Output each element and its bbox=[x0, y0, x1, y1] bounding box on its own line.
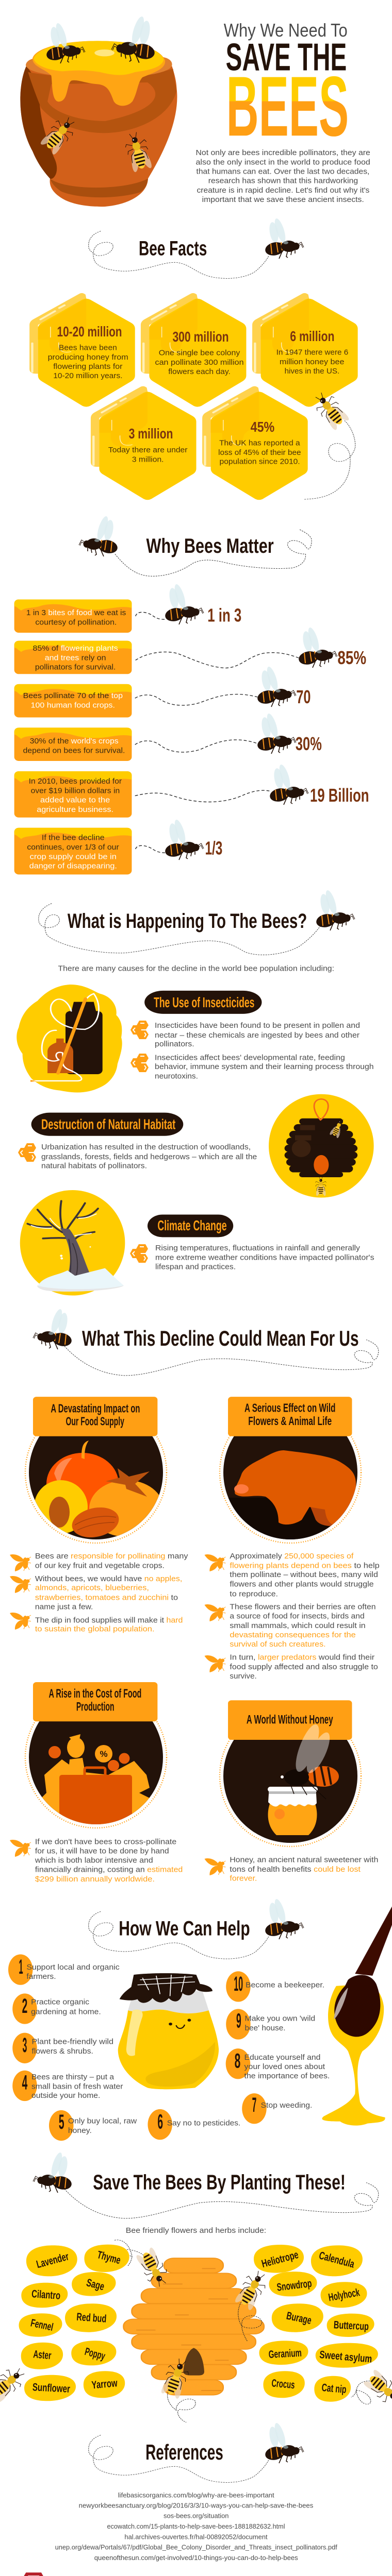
item 5: Only buy local, raw bbox=[68, 2116, 137, 2125]
panel: a serious effect on wild flowers and animal life bbox=[204, 1397, 380, 1681]
fact: 45%: 45% bbox=[251, 419, 274, 435]
text block with bee bullets: Without bees, we would have no apples, bbox=[35, 1574, 182, 1583]
fact: 10-20 million: 10-20 million years. bbox=[53, 371, 123, 380]
fact: 3 million bbox=[91, 386, 196, 500]
text block bbox=[155, 1244, 374, 1271]
item 10: Become a beekeeper. bbox=[246, 1980, 324, 1989]
panel: bee facts hexagons bbox=[29, 293, 358, 500]
text block with bee bullets bbox=[204, 1552, 380, 1681]
plant: Cilantro: Cilantro bbox=[31, 2288, 61, 2302]
fact: 300 million: can pollinate 300 million bbox=[155, 358, 244, 366]
fact: 10-20 million: 10-20 million bbox=[57, 324, 122, 340]
bar: 1/3 bbox=[14, 828, 222, 874]
item 4: outside your home. bbox=[31, 2091, 100, 2100]
plant: Calendula: Calendula bbox=[318, 2249, 356, 2270]
item 9: 9 bbox=[236, 2010, 241, 2032]
text block with bee bullets: survive. bbox=[230, 1672, 257, 1681]
plant: Sage bbox=[72, 2272, 116, 2296]
illustration: honey dipper bbox=[322, 1906, 392, 2126]
heading pill bbox=[144, 991, 262, 1014]
text block with bee bullets: them pollinate – without bees, many wild bbox=[230, 1570, 378, 1579]
text block with bee bullet: for us, it will have to be done by hand bbox=[35, 1846, 169, 1855]
item 4: 4 bbox=[22, 2072, 27, 2094]
card header bbox=[228, 1700, 352, 1740]
item 6 bbox=[148, 2109, 240, 2140]
illustration: fruit bbox=[34, 1440, 164, 1541]
text block with bee bullets: The dip in food supplies will make it hard bbox=[35, 1616, 183, 1624]
references list: queenofthesun.com/get-involved/10-things-you-can-do-to-help-bees bbox=[94, 2554, 298, 2562]
text block with bee bullets: name just a few. bbox=[35, 1603, 93, 1611]
item 2: Practice organic bbox=[31, 1997, 89, 2006]
plant: Cilantro bbox=[21, 2283, 68, 2308]
item 9: Make you own 'wild bbox=[245, 2014, 315, 2023]
panel: why bees matter bars bbox=[14, 583, 369, 874]
item 5: 5 bbox=[59, 2111, 64, 2133]
item 10: 10 bbox=[234, 1973, 243, 1995]
item 10 bbox=[226, 1971, 324, 2002]
panel: a devastating impact on our food supply bbox=[10, 1397, 188, 1633]
bar: 19 Billion: over $19 billion dollars in bbox=[31, 786, 120, 795]
plant: Thyme bbox=[84, 2245, 129, 2272]
illustration: bear bbox=[223, 1450, 357, 1544]
plant: Heliotrope: Heliotrope bbox=[260, 2249, 300, 2270]
plant: Lavender bbox=[26, 2245, 77, 2276]
icon: yellow bee on hexagons bbox=[310, 388, 352, 432]
references list: ecowatch.com/15-plants-to-help-save-bees-1881882632.html bbox=[107, 2522, 285, 2530]
item 8: your loved ones about bbox=[244, 2062, 325, 2071]
text block with bee bullets: to sustain the global population. bbox=[35, 1625, 155, 1633]
illustration: honey jar and bee bbox=[268, 1766, 339, 1835]
plant: Crocus bbox=[263, 2371, 305, 2398]
bar: 19 Billion: added value to the bbox=[40, 795, 110, 804]
bar: 1/3: continues, over 1/3 of our bbox=[27, 843, 119, 852]
heading: Why Bees Matter bbox=[79, 515, 312, 576]
references list bbox=[55, 2491, 337, 2562]
fact: 6 million: 6 million bbox=[290, 329, 335, 345]
item 3: flowers & shrubs. bbox=[32, 2047, 93, 2056]
bar: 85%: 85% of flowering plants bbox=[32, 644, 118, 653]
plant: Sunflower bbox=[24, 2375, 76, 2401]
heading: Bee Facts bbox=[89, 217, 304, 278]
fact: 10-20 million: flowering plants for bbox=[53, 362, 123, 370]
item 7: 7 bbox=[252, 2094, 256, 2116]
text block: Insecticides affect bees' developmental rate, feeding bbox=[155, 1053, 345, 1062]
logo: Anypest bbox=[18, 2572, 123, 2576]
text block with bee bullet: which is both labor intensive and bbox=[35, 1856, 153, 1865]
plant: Calendula bbox=[311, 2245, 363, 2276]
fact: 6 million: million honey bee bbox=[280, 358, 344, 366]
text block with bee bullets: strawberries, tomatoes and zucchini to bbox=[35, 1594, 178, 1602]
illustration: sprayer bbox=[17, 985, 122, 1092]
text block with bee bullets: devastating consequences for the bbox=[230, 1631, 356, 1639]
heading pill bbox=[31, 1113, 183, 1136]
plant: Thyme: Thyme bbox=[96, 2249, 122, 2266]
text block with bee bullets: food supply affected and also struggle to bbox=[230, 1663, 378, 1671]
heading: How We Can Help: How We Can Help bbox=[119, 1918, 250, 1940]
bar: 1 in 3: 1 in 3 bbox=[207, 605, 241, 626]
bar: 30%: 30% of the world's crops bbox=[30, 737, 119, 745]
bar: 70: Bees pollinate 70 of the top bbox=[23, 691, 123, 700]
bar: 19 Billion: agriculture business. bbox=[37, 805, 113, 814]
item 6: Say no to pesticides. bbox=[167, 2119, 240, 2127]
heading pill: Climate Change bbox=[157, 1218, 227, 1233]
card header: A Rise in the Cost of Food bbox=[49, 1687, 141, 1700]
text block with bee bullets bbox=[10, 1552, 188, 1633]
icons: bees around the hive bbox=[0, 2245, 392, 2410]
text block with bee bullets: almonds, apricots, blueberries, bbox=[35, 1584, 149, 1592]
text block with bee bullets: of our key fruit and vegetable crops. bbox=[35, 1562, 165, 1570]
plant: Burage: Burage bbox=[285, 2310, 313, 2327]
plant: Buttercup: Buttercup bbox=[333, 2319, 369, 2333]
item 3: Plant bee-friendly wild bbox=[32, 2037, 113, 2046]
fact: 3 million: 3 million bbox=[129, 426, 173, 442]
fact: 300 million: 300 million bbox=[172, 329, 229, 345]
item 7 bbox=[242, 2093, 312, 2124]
item 5 bbox=[49, 2110, 137, 2141]
bar: 1/3: crop supply could be in bbox=[30, 852, 117, 861]
percent badge label: % bbox=[100, 1749, 108, 1759]
panel: the use of insecticides bbox=[17, 985, 374, 1092]
item 2 bbox=[12, 1993, 101, 2024]
heading: Bee Facts: Bee Facts bbox=[139, 237, 207, 260]
illustration: orange beehive bbox=[115, 2240, 372, 2422]
text block: natural habitats of pollinators. bbox=[41, 1161, 147, 1170]
text block: grasslands, forests, fields and hedgerows – which are all the bbox=[41, 1152, 257, 1161]
illustration: honey pot with bees bbox=[20, 15, 177, 207]
text block with bee bullets: Approximately 250,000 species of bbox=[230, 1552, 354, 1561]
fact: 45%: loss of 45% of their bee bbox=[218, 448, 301, 456]
heading: Why Bees Matter: Why Bees Matter bbox=[146, 534, 274, 557]
bar: 1 in 3 bbox=[14, 599, 241, 633]
fact: 45%: The UK has reported a bbox=[219, 438, 300, 447]
item 3: 3 bbox=[23, 2034, 27, 2057]
heading: What is Happening To The Bees?: There are many causes for the decline in the world bee population including: bbox=[58, 964, 334, 973]
fact: 6 million bbox=[252, 293, 358, 407]
plant: Geranium: Geranium bbox=[268, 2347, 302, 2361]
heading pill: The Use of Insecticides bbox=[154, 994, 254, 1011]
text block with bee bullets: survival of such creatures. bbox=[230, 1640, 326, 1649]
item 1 bbox=[8, 1954, 120, 1985]
item 4 bbox=[12, 2071, 123, 2101]
item 8 bbox=[226, 2048, 330, 2080]
fact: 3 million: Today there are under bbox=[108, 445, 188, 454]
panel: destruction of natural habitat bbox=[18, 1094, 374, 1198]
plant: Sweet asylum bbox=[316, 2343, 378, 2368]
heading: References bbox=[89, 2422, 304, 2482]
plant: Yarrow bbox=[84, 2371, 125, 2398]
text block with bee bullet bbox=[10, 1837, 183, 1884]
plant: Sage: Sage bbox=[85, 2277, 106, 2293]
intro text bbox=[196, 148, 370, 204]
panel: plant labels bbox=[19, 2245, 378, 2402]
bar: 19 Billion: In 2010, bees provided for bbox=[29, 777, 122, 786]
item 1: 1 bbox=[19, 1956, 23, 1978]
references list: hal.archives-ouvertes.fr/hal-00892052/document bbox=[124, 2533, 268, 2541]
panel: climate change bbox=[20, 1190, 374, 1296]
bar: 19 Billion bbox=[14, 771, 369, 818]
card header bbox=[33, 1682, 157, 1721]
icon: translucent bee wings bbox=[291, 1722, 334, 1776]
plant: Holyhock bbox=[321, 2282, 367, 2308]
item 8: the importance of bees. bbox=[244, 2071, 330, 2080]
heading pill: Destruction of Natural Habitat bbox=[41, 1116, 175, 1132]
panel: how we can help bbox=[8, 1906, 392, 2141]
fact: 3 million: 3 million. bbox=[132, 455, 164, 464]
text block with bee bullets: These flowers and their berries are often bbox=[230, 1603, 376, 1611]
item 9 bbox=[226, 2009, 315, 2040]
item 2: gardening at home. bbox=[31, 2007, 101, 2016]
fact: 300 million: flowers each day. bbox=[168, 367, 231, 376]
card header: Flowers & Animal Life bbox=[248, 1414, 332, 1428]
item 4: small basin of fresh water bbox=[31, 2082, 123, 2091]
plant: Heliotrope bbox=[254, 2245, 304, 2273]
bar: 1/3: danger of disappearing. bbox=[29, 861, 117, 870]
text block: nectar – these chemicals are ingested by bees and other bbox=[155, 1030, 360, 1039]
heading: What is Happening To The Bees? bbox=[39, 889, 355, 973]
panel: a world without honey bbox=[204, 1700, 378, 1883]
references list: sos-bees.org/situation bbox=[164, 2512, 229, 2520]
bar: 85%: pollinators for survival. bbox=[35, 663, 116, 671]
item 1: farmers. bbox=[26, 1972, 56, 1981]
bar: 70: 70 bbox=[296, 687, 311, 708]
text block with bee bullets: flowers and other plants would struggle bbox=[230, 1580, 374, 1588]
panel: a rise in the cost of food production bbox=[10, 1682, 183, 1884]
plant: Red bud bbox=[65, 2303, 117, 2332]
text block: Urbanization has resulted in the destruction of woodlands, bbox=[41, 1143, 251, 1151]
text block: Rising temperatures, fluctuations in rainfall and generally bbox=[155, 1244, 361, 1252]
plant: Holyhock: Holyhock bbox=[328, 2286, 361, 2303]
illustration: beehive bbox=[269, 1094, 374, 1198]
plant: Aster: Aster bbox=[33, 2348, 52, 2362]
item 6: 6 bbox=[157, 2111, 163, 2133]
fact: 300 million bbox=[141, 293, 246, 407]
item 4: Bees are thirsty – put a bbox=[31, 2072, 115, 2081]
plant: Yarrow: Yarrow bbox=[91, 2377, 118, 2391]
text block with bee bullet: forever. bbox=[230, 1874, 257, 1883]
card header: A Devastating Impact on bbox=[51, 1402, 140, 1415]
item 9: bee' house. bbox=[245, 2023, 286, 2032]
heading pill bbox=[148, 1215, 233, 1237]
heading: How We Can Help bbox=[89, 1898, 304, 1959]
plant: Burage bbox=[272, 2303, 323, 2332]
plant: Aster bbox=[21, 2343, 63, 2369]
item 3 bbox=[12, 2033, 113, 2063]
fact: 45%: population since 2010. bbox=[220, 457, 300, 466]
text block with bee bullets: a source of food for insects, birds and bbox=[230, 1612, 365, 1620]
fact: 10-20 million bbox=[29, 293, 135, 407]
item 5: honey. bbox=[68, 2126, 92, 2135]
bar: 85%: 85% bbox=[337, 648, 366, 668]
heading: References: References bbox=[145, 2441, 223, 2465]
text block with bee bullet: $299 billion annually worldwide. bbox=[35, 1875, 155, 1884]
text block with bee bullets: Bees are responsible for pollinating many bbox=[35, 1552, 188, 1561]
text block with bee bullet: tons of health benefits could be lost bbox=[230, 1865, 361, 1873]
plant: Snowdrop: Snowdrop bbox=[276, 2278, 313, 2294]
text block with bee bullet bbox=[204, 1855, 378, 1883]
plant: Cat nip: Cat nip bbox=[321, 2382, 347, 2396]
bar: 85% bbox=[14, 641, 366, 674]
fact: 6 million: hives in the US. bbox=[285, 367, 339, 375]
card header: Production bbox=[76, 1700, 115, 1714]
illustration: briefcase and money bbox=[42, 1734, 150, 1824]
plant: Fennel bbox=[19, 2313, 62, 2337]
text block with bee bullet: If we don't have bees to cross-pollinate bbox=[35, 1837, 176, 1846]
text block with bee bullets: to reproduce. bbox=[230, 1589, 278, 1598]
heading: Save The Bees By Planting These!: Bee friendly flowers and herbs include: bbox=[126, 2226, 266, 2234]
text block: Insecticides have been found to be present in pollen and bbox=[155, 1021, 360, 1030]
text block: more extreme weather conditions have impacted pollinator's bbox=[155, 1253, 374, 1262]
bar: 1 in 3: courtesy of pollination. bbox=[35, 618, 117, 626]
illustration: smiling honey jar bbox=[118, 1973, 219, 2089]
text block: neurotoxins. bbox=[155, 1072, 198, 1080]
title bbox=[224, 20, 349, 154]
card header bbox=[228, 1397, 352, 1436]
bar: 1/3: If the bee decline bbox=[42, 833, 105, 842]
text block with bee bullets: In turn, larger predators would find their bbox=[230, 1653, 375, 1662]
plant: Poppy bbox=[71, 2341, 116, 2365]
text block with bee bullets: flowering plants depend on bees to help bbox=[230, 1562, 380, 1570]
item 8: 8 bbox=[235, 2050, 240, 2073]
fact: 10-20 million: producing honey from bbox=[48, 353, 128, 362]
fact: 300 million: One single bee colony bbox=[159, 348, 240, 357]
references list: lifebasicsorganics.com/blog/why-are-bees-important bbox=[118, 2491, 274, 2499]
text block bbox=[155, 1021, 374, 1080]
plant: Poppy: Poppy bbox=[84, 2346, 107, 2363]
plant: Sunflower: Sunflower bbox=[32, 2381, 70, 2395]
fact: 45% bbox=[202, 386, 308, 500]
item 7: Stop weeding. bbox=[261, 2101, 312, 2110]
bar: 30%: depend on bees for survival. bbox=[23, 746, 125, 755]
text block with bee bullet: financially draining, costing an estimated bbox=[35, 1865, 183, 1874]
bar: 30%: 30% bbox=[296, 734, 322, 755]
bar: 85%: and trees rely on bbox=[45, 653, 106, 662]
heading: What This Decline Could Mean For Us bbox=[33, 1308, 379, 1376]
bar: 70: 100 human food crops. bbox=[31, 701, 115, 709]
card header: Our Food Supply bbox=[66, 1415, 124, 1428]
bar: 70 bbox=[14, 684, 311, 717]
text block: pollinators. bbox=[155, 1040, 194, 1048]
fact: 10-20 million: Bees have been bbox=[59, 343, 117, 352]
plant: Snowdrop bbox=[269, 2272, 317, 2296]
text block: lifespan and practices. bbox=[155, 1263, 236, 1271]
bar: 30% bbox=[14, 727, 322, 761]
item 1: Support local and organic bbox=[26, 1963, 120, 1972]
plant: Buttercup bbox=[327, 2314, 374, 2337]
plant: Sweet asylum: Sweet asylum bbox=[319, 2349, 372, 2365]
text block with bee bullets: small mammals, which could result in bbox=[230, 1621, 366, 1630]
plant: Fennel: Fennel bbox=[29, 2317, 54, 2333]
plant: Crocus: Crocus bbox=[271, 2377, 295, 2391]
bar: 1/3: 1/3 bbox=[205, 838, 222, 859]
card header bbox=[33, 1397, 157, 1436]
item 2: 2 bbox=[22, 1995, 27, 2018]
plant: Red bud: Red bud bbox=[76, 2311, 107, 2325]
fact: 6 million: In 1947 there were 6 bbox=[276, 348, 348, 357]
plant: Cat nip bbox=[314, 2376, 351, 2402]
heading: Save The Bees By Planting These! bbox=[33, 2151, 379, 2234]
plant: Lavender: Lavender bbox=[35, 2250, 70, 2270]
illustration: bare tree in snow bbox=[20, 1190, 125, 1296]
bar: 1 in 3: 1 in 3 bites of food we eat is bbox=[26, 608, 126, 617]
item 8: Educate yourself and bbox=[244, 2053, 320, 2061]
plant: Geranium bbox=[259, 2341, 308, 2365]
text block bbox=[41, 1143, 257, 1170]
